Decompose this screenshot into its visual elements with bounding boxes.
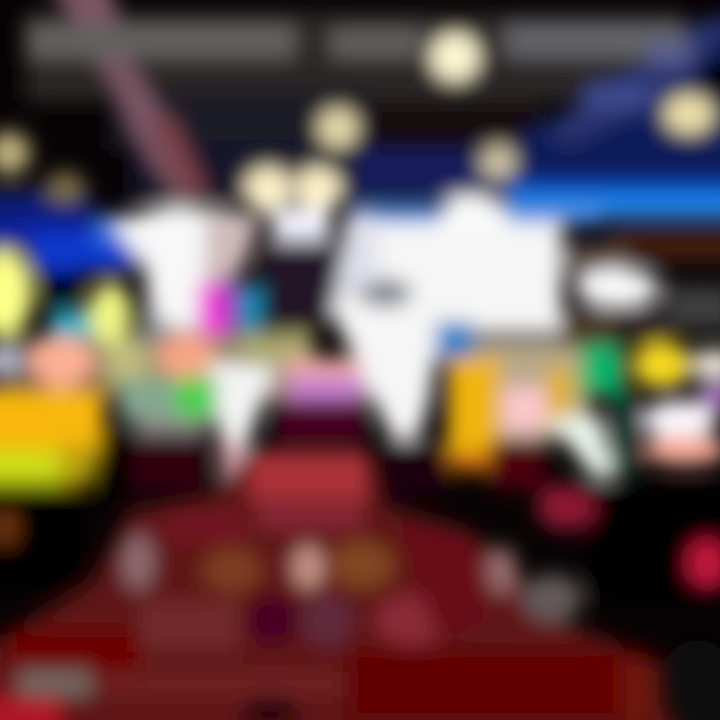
right machines: blue, amber, green, yellow: [436, 322, 720, 480]
dark carpet shadows and machine bases: [0, 430, 720, 600]
ceiling lights: [0, 33, 714, 213]
magenta machine, centre: [275, 358, 365, 440]
yellow machine, far left: [0, 388, 104, 486]
blue sign, left: [0, 190, 135, 272]
red carpet floor: [0, 450, 700, 720]
left machine: lime and teal: [0, 249, 213, 388]
green machine: [119, 378, 217, 436]
blue light strip, right: [350, 180, 720, 225]
title band: illegible blurred lettering: [25, 24, 690, 64]
white hanging banners: [112, 195, 562, 495]
dark stool, bottom right: [658, 640, 720, 720]
carpet pattern highlights: [18, 534, 582, 720]
pink diagonal column: [46, 0, 208, 205]
red accent spots: [0, 483, 720, 587]
dark central sign: [198, 246, 344, 366]
ceiling: dark area with blue panels: [25, 10, 720, 200]
brown and white machines, right: [560, 228, 720, 347]
mid-tone machine backdrop: [0, 335, 590, 440]
